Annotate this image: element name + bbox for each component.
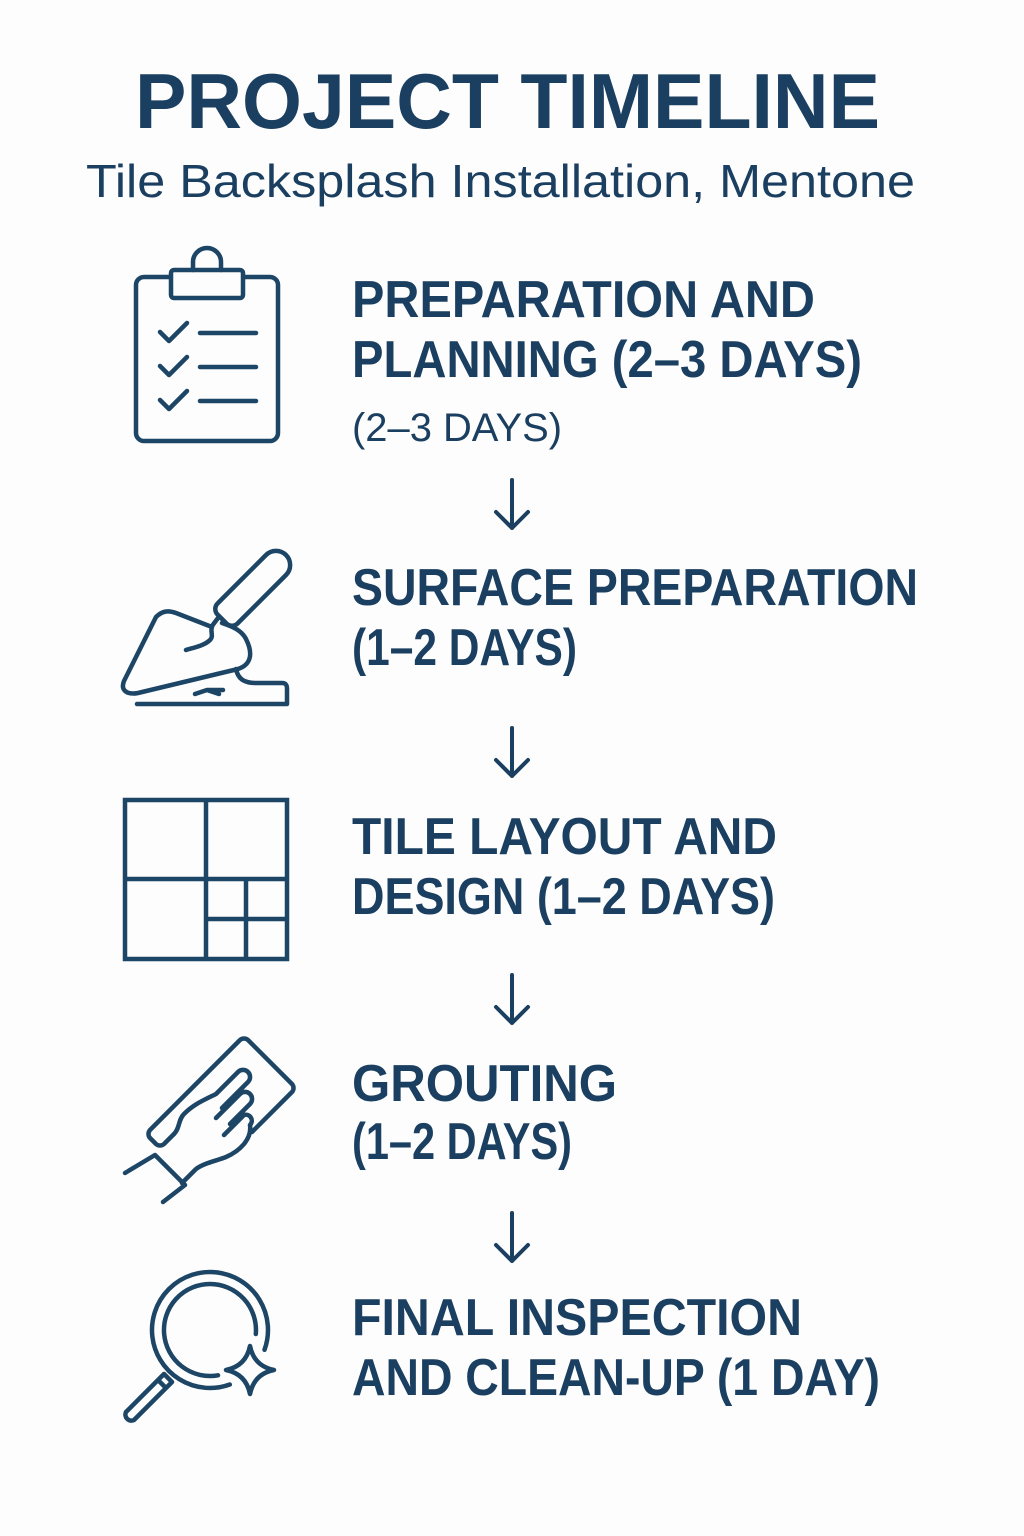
icon: magnifier with sparkle bbox=[125, 1272, 274, 1421]
icon: trowel bbox=[123, 551, 290, 704]
step 4 text: GROUTING bbox=[352, 1055, 617, 1113]
step 1 text: PREPARATION AND bbox=[352, 271, 815, 329]
step 3 text: TILE LAYOUT AND bbox=[352, 808, 777, 866]
step 1 text bbox=[352, 271, 862, 450]
step 1 text: (2–3 DAYS) bbox=[352, 406, 562, 450]
arrow 3 bbox=[496, 975, 528, 1023]
step 1 text: PLANNING (2–3 DAYS) bbox=[352, 331, 862, 389]
icon: clipboard bbox=[136, 248, 278, 441]
step 2 text: (1–2 DAYS) bbox=[352, 619, 577, 677]
icon: tile grid bbox=[125, 800, 287, 959]
arrow 1 bbox=[496, 480, 528, 528]
arrow 4 bbox=[496, 1213, 528, 1261]
step 5 text: FINAL INSPECTION bbox=[352, 1289, 802, 1347]
step 5 text bbox=[352, 1289, 880, 1407]
step 5 text: AND CLEAN-UP (1 DAY) bbox=[352, 1349, 880, 1407]
title: PROJECT TIMELINE bbox=[135, 57, 880, 145]
step 3 text: DESIGN (1–2 DAYS) bbox=[352, 868, 775, 926]
subtitle: Tile Backsplash Installation, Mentone bbox=[86, 155, 915, 207]
step 3 text bbox=[352, 808, 777, 926]
step 2 text: SURFACE PREPARATION bbox=[352, 559, 918, 617]
arrow 2 bbox=[496, 728, 528, 776]
step 4 text bbox=[352, 1055, 617, 1171]
step 4 text: (1–2 DAYS) bbox=[352, 1113, 572, 1171]
step 2 text bbox=[352, 559, 918, 677]
icon: grout float with hand bbox=[125, 1038, 294, 1202]
